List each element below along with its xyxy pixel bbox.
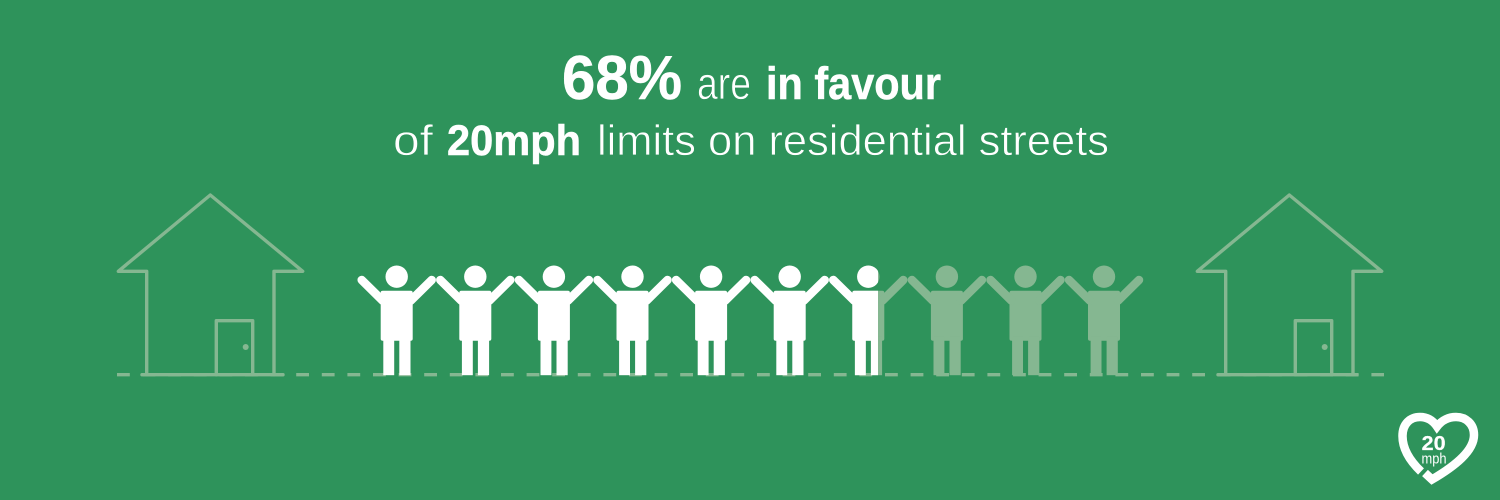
logo: 20mph heart: 20	[1422, 433, 1446, 455]
person 3 in favour	[519, 266, 589, 375]
logo: 20mph heart: mph	[1422, 452, 1446, 468]
people row: 68 percent in favour	[362, 266, 1139, 375]
title: in favour	[766, 58, 941, 109]
title: are	[697, 58, 751, 109]
icon: right house	[1197, 195, 1382, 375]
logo: 20mph heart	[1402, 417, 1474, 480]
title	[393, 44, 1109, 165]
person 8 not in favour	[912, 266, 982, 375]
title: limits on residential streets	[597, 117, 1109, 165]
person 5 in favour	[676, 266, 746, 375]
dashed ground line	[117, 373, 1384, 376]
person 9 not in favour	[990, 266, 1060, 375]
person 6 in favour	[755, 266, 825, 375]
person 1 in favour	[362, 266, 432, 375]
title: of	[393, 117, 434, 165]
person 7 partly in favour	[833, 266, 903, 375]
person 10 not in favour	[1069, 266, 1139, 375]
person 4 in favour	[598, 266, 668, 375]
person 2 in favour	[440, 266, 510, 375]
title: 68%	[562, 44, 682, 113]
title: 20mph	[447, 117, 581, 165]
icon: left house	[118, 195, 303, 375]
